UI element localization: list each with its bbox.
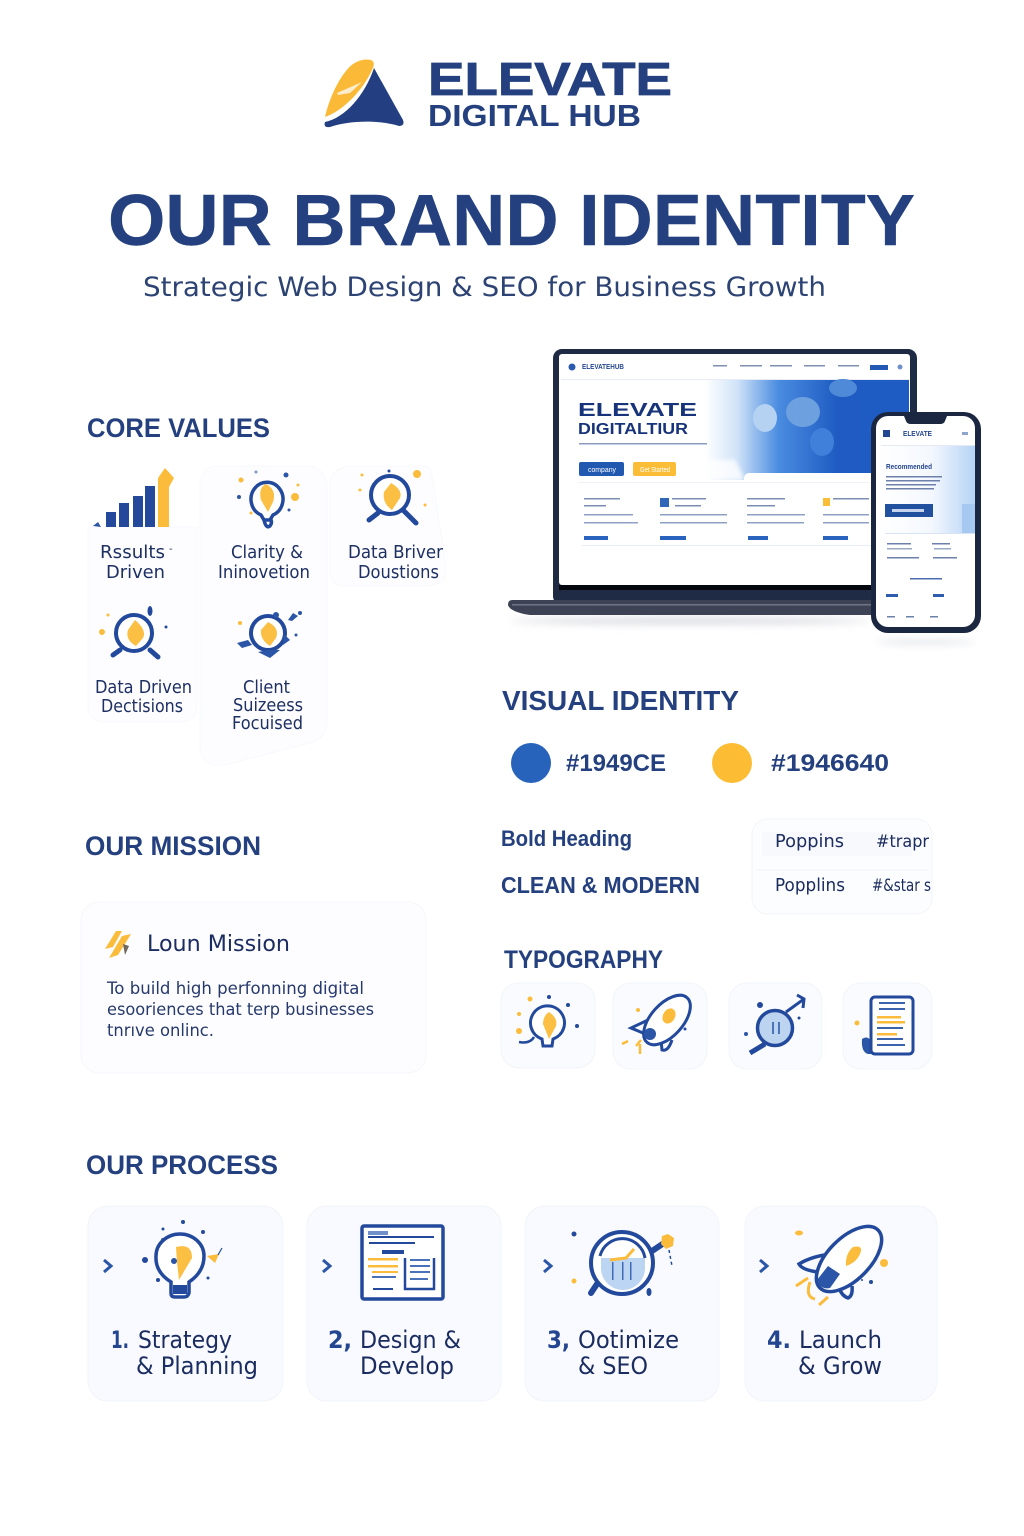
mission text: tnrıve onlinc. [107, 1021, 214, 1040]
swatch: yellow [712, 743, 889, 783]
icon: magnifier [572, 1232, 674, 1296]
icon tiles [501, 983, 932, 1069]
label: Ootimize [578, 1326, 679, 1354]
label: client success focused: Client [243, 677, 290, 698]
laptop hero: DIGITALTIUR [578, 421, 688, 438]
heading: core values: CORE VALUES [87, 413, 270, 443]
label: Strategy [138, 1326, 232, 1354]
item: data driven decisions [95, 606, 192, 717]
tile: rocket [613, 983, 707, 1069]
laptop hero: company [588, 467, 616, 474]
laptop hero [578, 379, 909, 480]
label: 4. [767, 1326, 791, 1354]
label: client success focused: Focuised [232, 713, 303, 734]
logo mark [325, 60, 404, 127]
label: 1. [111, 1326, 129, 1354]
font table: #&star s [872, 876, 931, 896]
logo wordmark: DIGITAL HUB [428, 98, 641, 133]
swatch: yellow: #1946640 [771, 750, 889, 777]
font table: Poppins [775, 832, 844, 852]
label: data driver questions: Data Briver [348, 542, 444, 563]
label: & Grow [798, 1352, 882, 1380]
tile: magnifier [729, 983, 822, 1069]
icon: lens [358, 470, 426, 523]
icon: web page [362, 1226, 443, 1299]
heading: visual identity: VISUAL IDENTITY [502, 685, 739, 716]
logo [325, 53, 672, 133]
swatch: blue [511, 743, 666, 783]
step 1 [88, 1206, 283, 1401]
label: results driven: Rssults [100, 542, 165, 563]
step 3 [525, 1206, 719, 1401]
logo wordmark: ELEVATE [428, 53, 672, 105]
font table: #trapr [876, 832, 929, 852]
tile: bulb [501, 983, 595, 1068]
step 2 [307, 1206, 501, 1401]
icon: bar chart [93, 468, 174, 527]
phone content: ELEVATE [903, 431, 932, 438]
typography styles [501, 826, 700, 898]
typography styles: Bold Heading [501, 826, 632, 851]
label: data driven decisions: Data Driven [95, 677, 192, 698]
phone [871, 412, 981, 644]
arrow [104, 1260, 111, 1272]
arrow [323, 1260, 330, 1272]
label: Launch [799, 1326, 882, 1354]
laptop nav [561, 364, 909, 380]
title: OUR BRAND IDENTITY [108, 181, 915, 261]
panel: process [88, 1206, 937, 1401]
font table [752, 819, 932, 914]
laptop content columns [578, 473, 879, 546]
icon: lens [99, 606, 168, 657]
mission title: Loun Mission [147, 932, 290, 957]
icon: client lens [237, 611, 302, 658]
label: results driven: Driven [106, 562, 165, 583]
typography styles: CLEAN & MODERN [501, 872, 700, 898]
icon: bulb [142, 1220, 222, 1297]
label: client success focused: Suizeess [233, 695, 303, 716]
logo wordmark [428, 53, 672, 133]
tile: document [843, 983, 932, 1069]
label: clarity and innovation: Ininovetion [218, 562, 310, 583]
laptop [508, 349, 917, 624]
icon: mission [105, 931, 131, 958]
heading: our mission: OUR MISSION [85, 831, 261, 861]
laptop hero: ELEVATE [578, 400, 697, 420]
label: 2, [328, 1326, 352, 1354]
phone content [881, 430, 975, 618]
label: results driven: - [169, 544, 173, 555]
mission text: esooriences that terp businesses [107, 1000, 374, 1019]
heading: typography: TYPOGRAPHY [504, 946, 663, 974]
arrow [544, 1260, 551, 1272]
step 4 [745, 1206, 937, 1401]
label: Design & [360, 1326, 461, 1354]
label: clarity and innovation: Clarity & [231, 542, 303, 563]
icon: light bulb [237, 470, 300, 527]
heading: our process: OUR PROCESS [86, 1150, 278, 1180]
panel: core values [88, 466, 446, 765]
arrow [760, 1260, 767, 1272]
mission text: To build high perfonning digital [106, 979, 364, 998]
laptop hero: Get Started [640, 467, 670, 474]
card: clarity and innovation [200, 466, 327, 765]
font table: Popplins [775, 876, 845, 896]
label: data driver questions: Doustions [358, 562, 439, 583]
icon: rocket [795, 1215, 893, 1305]
card: results driven [88, 468, 197, 722]
card: data driven questions [330, 466, 446, 586]
panel: mission [81, 902, 426, 1073]
label: & SEO [578, 1352, 648, 1380]
subtitle: Strategic Web Design & SEO for Business Growth [143, 272, 826, 303]
label: data driven decisions: Dectisions [101, 696, 183, 717]
swatch: blue: #1949CE [566, 750, 666, 777]
label: 3, [547, 1326, 570, 1354]
phone content: Recommended [886, 464, 932, 471]
device mockups [508, 349, 981, 644]
label: & Planning [136, 1352, 258, 1380]
label: Develop [360, 1352, 454, 1380]
laptop nav: ELEVATEHUB [582, 364, 624, 371]
colour swatches [511, 743, 889, 783]
